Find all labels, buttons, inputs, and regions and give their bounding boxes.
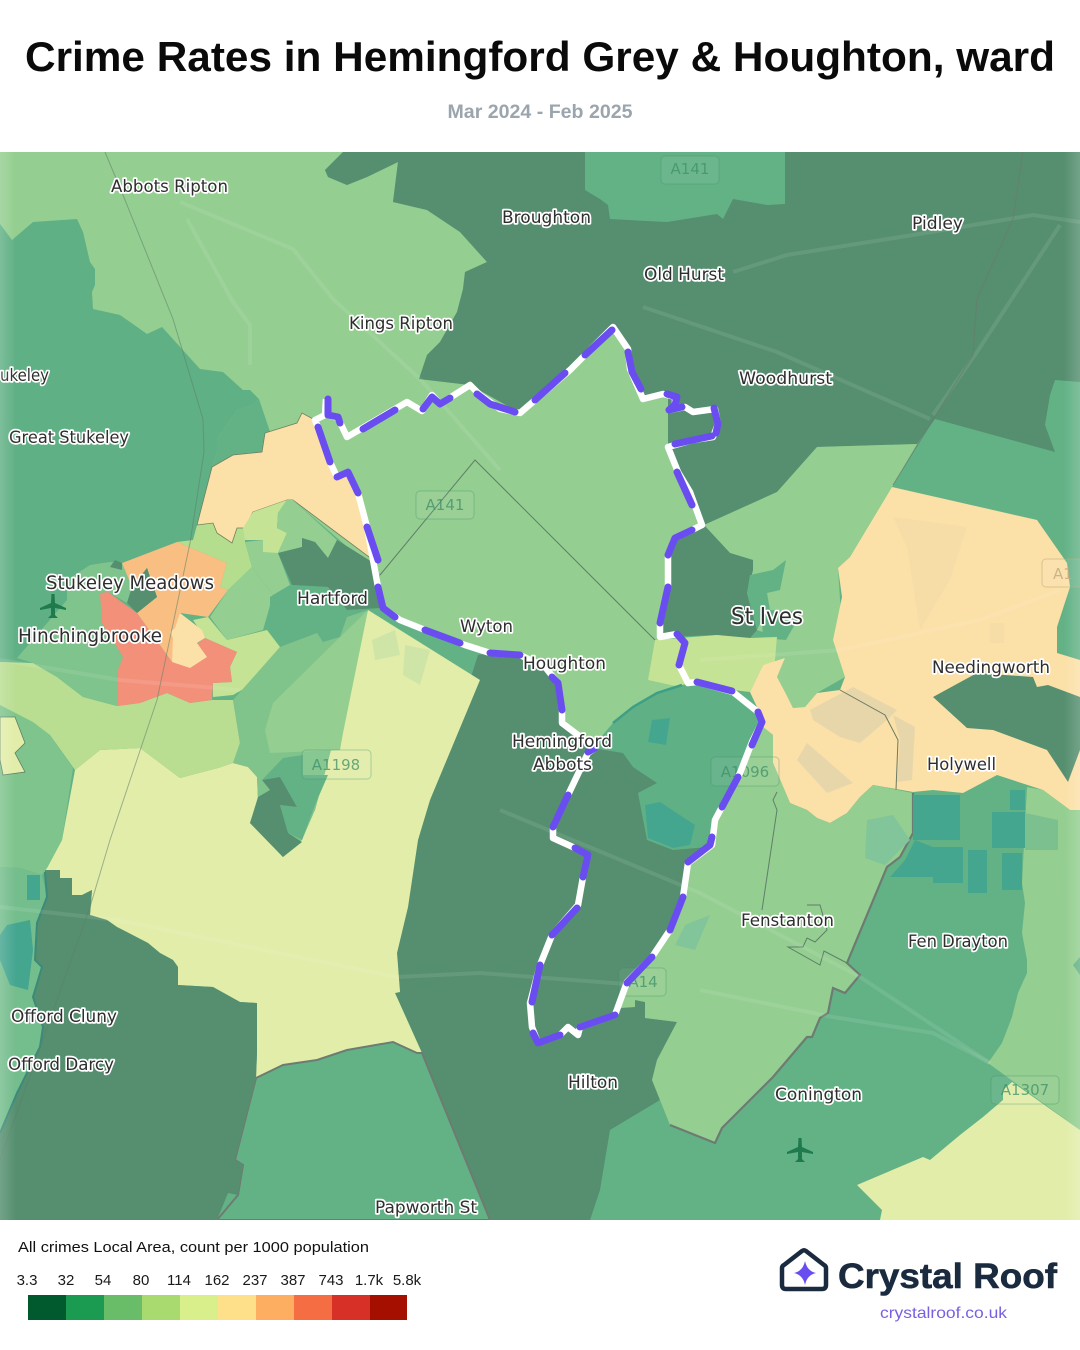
legend scale values: 32: [58, 1272, 74, 1289]
Fen Drayton teal buildings: [890, 790, 1025, 893]
legend scale values: 162: [204, 1272, 230, 1289]
east edge patch: [1073, 957, 1080, 975]
region: yellow-green west Huntingdon: [177, 523, 252, 590]
place labels: Papworth St: [375, 1198, 477, 1218]
region: bottom left dark: [0, 870, 257, 1220]
place labels: Conington: [775, 1085, 862, 1105]
Fenstanton inner boundary: [762, 792, 777, 910]
place labels: Pidley: [912, 214, 963, 234]
region: Huntingdon light green 2: [245, 540, 290, 595]
legend scale values: 743: [318, 1272, 344, 1289]
region: Huntingdon light green 1: [210, 567, 273, 640]
logo: Crystal Roof: [782, 1250, 1057, 1322]
place labels: Hinchingbrooke: [18, 625, 162, 647]
region: northern dark area: [325, 152, 1080, 525]
legend scale values: 3.3: [17, 1272, 37, 1289]
road shield A1 east edge: A1: [1053, 565, 1073, 583]
region: far east light band: [988, 787, 1080, 1130]
road shield A1307: A1307: [1001, 1081, 1049, 1099]
road shield A1307: [991, 1076, 1059, 1104]
place labels: Hilton: [568, 1073, 618, 1093]
place labels: Hartford: [297, 589, 368, 609]
region: small dark patch 2: [127, 568, 157, 613]
place labels: Old Hurst: [644, 265, 724, 285]
region: right tan: [750, 487, 1080, 823]
place labels: Fen Drayton: [908, 932, 1008, 952]
road shield A1 east edge: [1042, 559, 1080, 587]
Fenstanton pale estates: [675, 815, 910, 950]
road shield A1198: [302, 750, 371, 779]
legend scale values: 387: [280, 1272, 306, 1289]
region: river corridor mid green: [262, 755, 328, 840]
region: St Ives south yellow-green: [648, 635, 777, 692]
region: small dark patch 1: [110, 560, 122, 570]
far east pale estate: [1025, 813, 1058, 850]
place labels: Stukeley Meadows: [46, 572, 214, 594]
road shield A1096: [711, 757, 779, 786]
region: river corridor dark: [250, 777, 302, 857]
region: Hartford dark: [278, 538, 382, 610]
region: Hilton and Hemingford dark: [395, 653, 707, 1220]
legend: [17, 1239, 422, 1320]
region: Needingworth dark: [933, 673, 1080, 782]
district boundary lines: [0, 152, 1023, 1160]
place labels: Hemingford: [512, 732, 612, 752]
region: river corridor lighter: [265, 610, 368, 753]
place labels: Offord Darcy: [8, 1055, 114, 1075]
ward boundary: [315, 327, 762, 1043]
legend scale values: 80: [133, 1272, 149, 1289]
website url: crystalroof.co.uk: [880, 1305, 1008, 1322]
legend title: All crimes Local Area, count per 1000 population: [18, 1239, 369, 1256]
road shield A1096: A1096: [721, 763, 769, 781]
region: west green: [0, 705, 73, 875]
region: Fenstanton light green: [615, 722, 913, 1143]
region: mid west light band: [0, 662, 240, 778]
region: ward light green: [380, 334, 698, 738]
river: [613, 685, 682, 723]
legend scale values: 54: [95, 1272, 111, 1289]
place labels: Kings Ripton: [349, 314, 453, 334]
legend scale values: 5.8k: [393, 1272, 422, 1289]
place labels: Houghton: [523, 654, 606, 674]
choropleth map: [0, 152, 1080, 1220]
region: river corridor: [233, 610, 368, 857]
patch: west small yellow: [0, 717, 25, 775]
region: Hartford tan: [197, 413, 377, 563]
roads: [0, 202, 1080, 1063]
place labels: [0, 177, 1050, 1218]
place labels: Holywell: [927, 755, 996, 775]
river west: [0, 872, 47, 1133]
region: bottom right yellow: [857, 1082, 1080, 1220]
place labels: Wyton: [460, 617, 513, 637]
legend scale values: [17, 1272, 422, 1289]
region: Hartford yellow-green patch: [243, 500, 287, 555]
region: Abbots Ripton light green: [0, 152, 487, 575]
region: south-west river strip: [0, 867, 47, 1133]
legend colour swatches: [28, 1295, 407, 1320]
region: St Ives dark: [660, 525, 757, 638]
icon: airport west: [40, 594, 66, 618]
region: Great Stukeley mid green: [0, 219, 259, 480]
region: Hemingford lobe mid green: [602, 684, 686, 736]
region: Huntingdon light yellow-green: [193, 617, 280, 697]
region: Hinchingbrooke green: [17, 562, 132, 706]
region: bottom centre mid green: [217, 1042, 490, 1220]
Fenstanton thick outer boundary: [670, 793, 913, 1143]
place labels: Woodhurst: [739, 369, 832, 389]
region: large yellow south-west: [45, 610, 480, 1078]
region: orange: [122, 542, 228, 662]
road shield A141 north: [661, 156, 719, 184]
place labels: Abbots Ripton: [111, 177, 228, 197]
subtitle: date range: Mar 2024 - Feb 2025: [448, 102, 633, 123]
road shield A141 north: A141: [671, 160, 709, 178]
icon: airport east: [787, 1138, 813, 1162]
west teal blocks: [0, 875, 40, 990]
road shields: [302, 156, 1080, 1104]
place labels: Great Stukeley: [9, 428, 129, 448]
logo wordmark: Crystal Roof: [838, 1257, 1057, 1296]
map edge fade: [0, 152, 1080, 1220]
title: Crime Rates in Hemingford Grey & Houghton, ward: [25, 33, 1055, 80]
place labels: Broughton: [502, 208, 591, 228]
region: cream centre: [170, 613, 207, 668]
place labels: Offord Cluny: [11, 1007, 117, 1027]
road shield A1198: A1198: [312, 756, 360, 774]
yellow zone estates: [372, 630, 430, 685]
place labels: Abbots: [533, 755, 592, 775]
road shield A141 centre: A141: [426, 496, 464, 514]
region: Hartford mid green: [270, 585, 378, 610]
region: Hartford light green: [277, 500, 337, 558]
icon: house with star: [782, 1250, 826, 1289]
road shield A14: [619, 968, 666, 996]
region: coral high-crime: [100, 592, 237, 706]
place labels: St Ives: [731, 604, 803, 630]
legend scale values: 1.7k: [355, 1272, 384, 1289]
tan buildings: [797, 687, 915, 793]
road shield A141 centre: [416, 491, 474, 519]
place labels: Needingworth: [932, 658, 1050, 678]
road shield A14: A14: [628, 973, 658, 991]
legend scale values: 114: [167, 1272, 191, 1289]
region: east of ward light green: [704, 444, 917, 708]
region: St Ives mid green: [747, 560, 802, 640]
tan ward split line: [840, 690, 898, 790]
legend scale values: 237: [242, 1272, 268, 1289]
place labels: Fenstanton: [741, 911, 834, 931]
place labels: ukeley: [0, 366, 49, 386]
region: top road green: [585, 152, 785, 222]
